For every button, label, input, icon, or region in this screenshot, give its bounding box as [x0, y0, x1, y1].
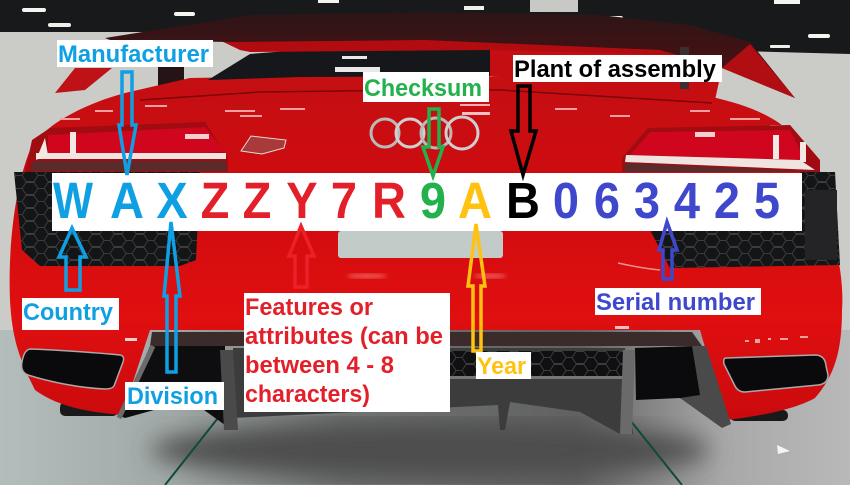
- label: Serial number: Serial number: [596, 289, 755, 316]
- label: Features or attributes: [244, 293, 450, 412]
- VIN letters: world manufacturer identifier: [53, 173, 188, 229]
- VIN letters: features or attributes: R: [372, 173, 406, 229]
- VIN letter: checksum: 9: [420, 173, 446, 229]
- VIN digits: serial number: 2: [714, 173, 740, 229]
- VIN letters: features or attributes: 7: [331, 173, 357, 229]
- VIN letters: features or attributes: Y: [286, 173, 318, 229]
- label: Plant of assembly: Plant of assembly: [514, 56, 717, 83]
- arrow: up from Serial number to digit 3/4: [659, 222, 677, 279]
- VIN character strip: [52, 173, 802, 231]
- VIN digits: serial number: 0: [553, 173, 579, 229]
- arrow: Plant of assembly down to B: [511, 86, 536, 175]
- label: Checksum: Checksum: [364, 75, 482, 102]
- arrow: up from Year to A: [468, 224, 485, 351]
- VIN digits: serial number: 6: [594, 173, 620, 229]
- label: Year: Year: [477, 353, 526, 380]
- VIN letters: features or attributes: Z: [243, 173, 271, 229]
- VIN digits: serial number: 3: [634, 173, 660, 229]
- arrow: Checksum down to 9: [423, 109, 443, 176]
- VIN letter: year: A: [458, 173, 492, 229]
- VIN digits: serial number: [553, 173, 780, 229]
- label: Manufacturer: Manufacturer: [58, 41, 209, 68]
- VIN letters: world manufacturer identifier: X: [156, 173, 188, 229]
- arrow: up from Country to W: [59, 228, 86, 290]
- VIN letter: plant of assembly: B: [506, 173, 540, 229]
- label: Features or attributes: Features or: [245, 294, 373, 321]
- label: Features or attributes: characters): [245, 381, 370, 408]
- VIN digits: serial number: 4: [674, 173, 700, 229]
- label: Division: Division: [127, 383, 218, 410]
- label: Features or attributes: attributes (can be: [245, 323, 443, 350]
- arrow: up from Features to Y: [289, 226, 314, 287]
- label: Features or attributes: between 4 - 8: [245, 352, 394, 379]
- VIN letters: features or attributes: Z: [201, 173, 229, 229]
- VIN letters: world manufacturer identifier: A: [110, 173, 144, 229]
- VIN digits: serial number: 5: [754, 173, 780, 229]
- arrow: Manufacturer down to A: [119, 72, 136, 175]
- VIN letters: world manufacturer identifier: W: [53, 173, 94, 229]
- arrow: up from Division to X: [164, 222, 180, 372]
- VIN letters: features or attributes: [201, 173, 406, 229]
- label: Country: Country: [23, 299, 114, 326]
